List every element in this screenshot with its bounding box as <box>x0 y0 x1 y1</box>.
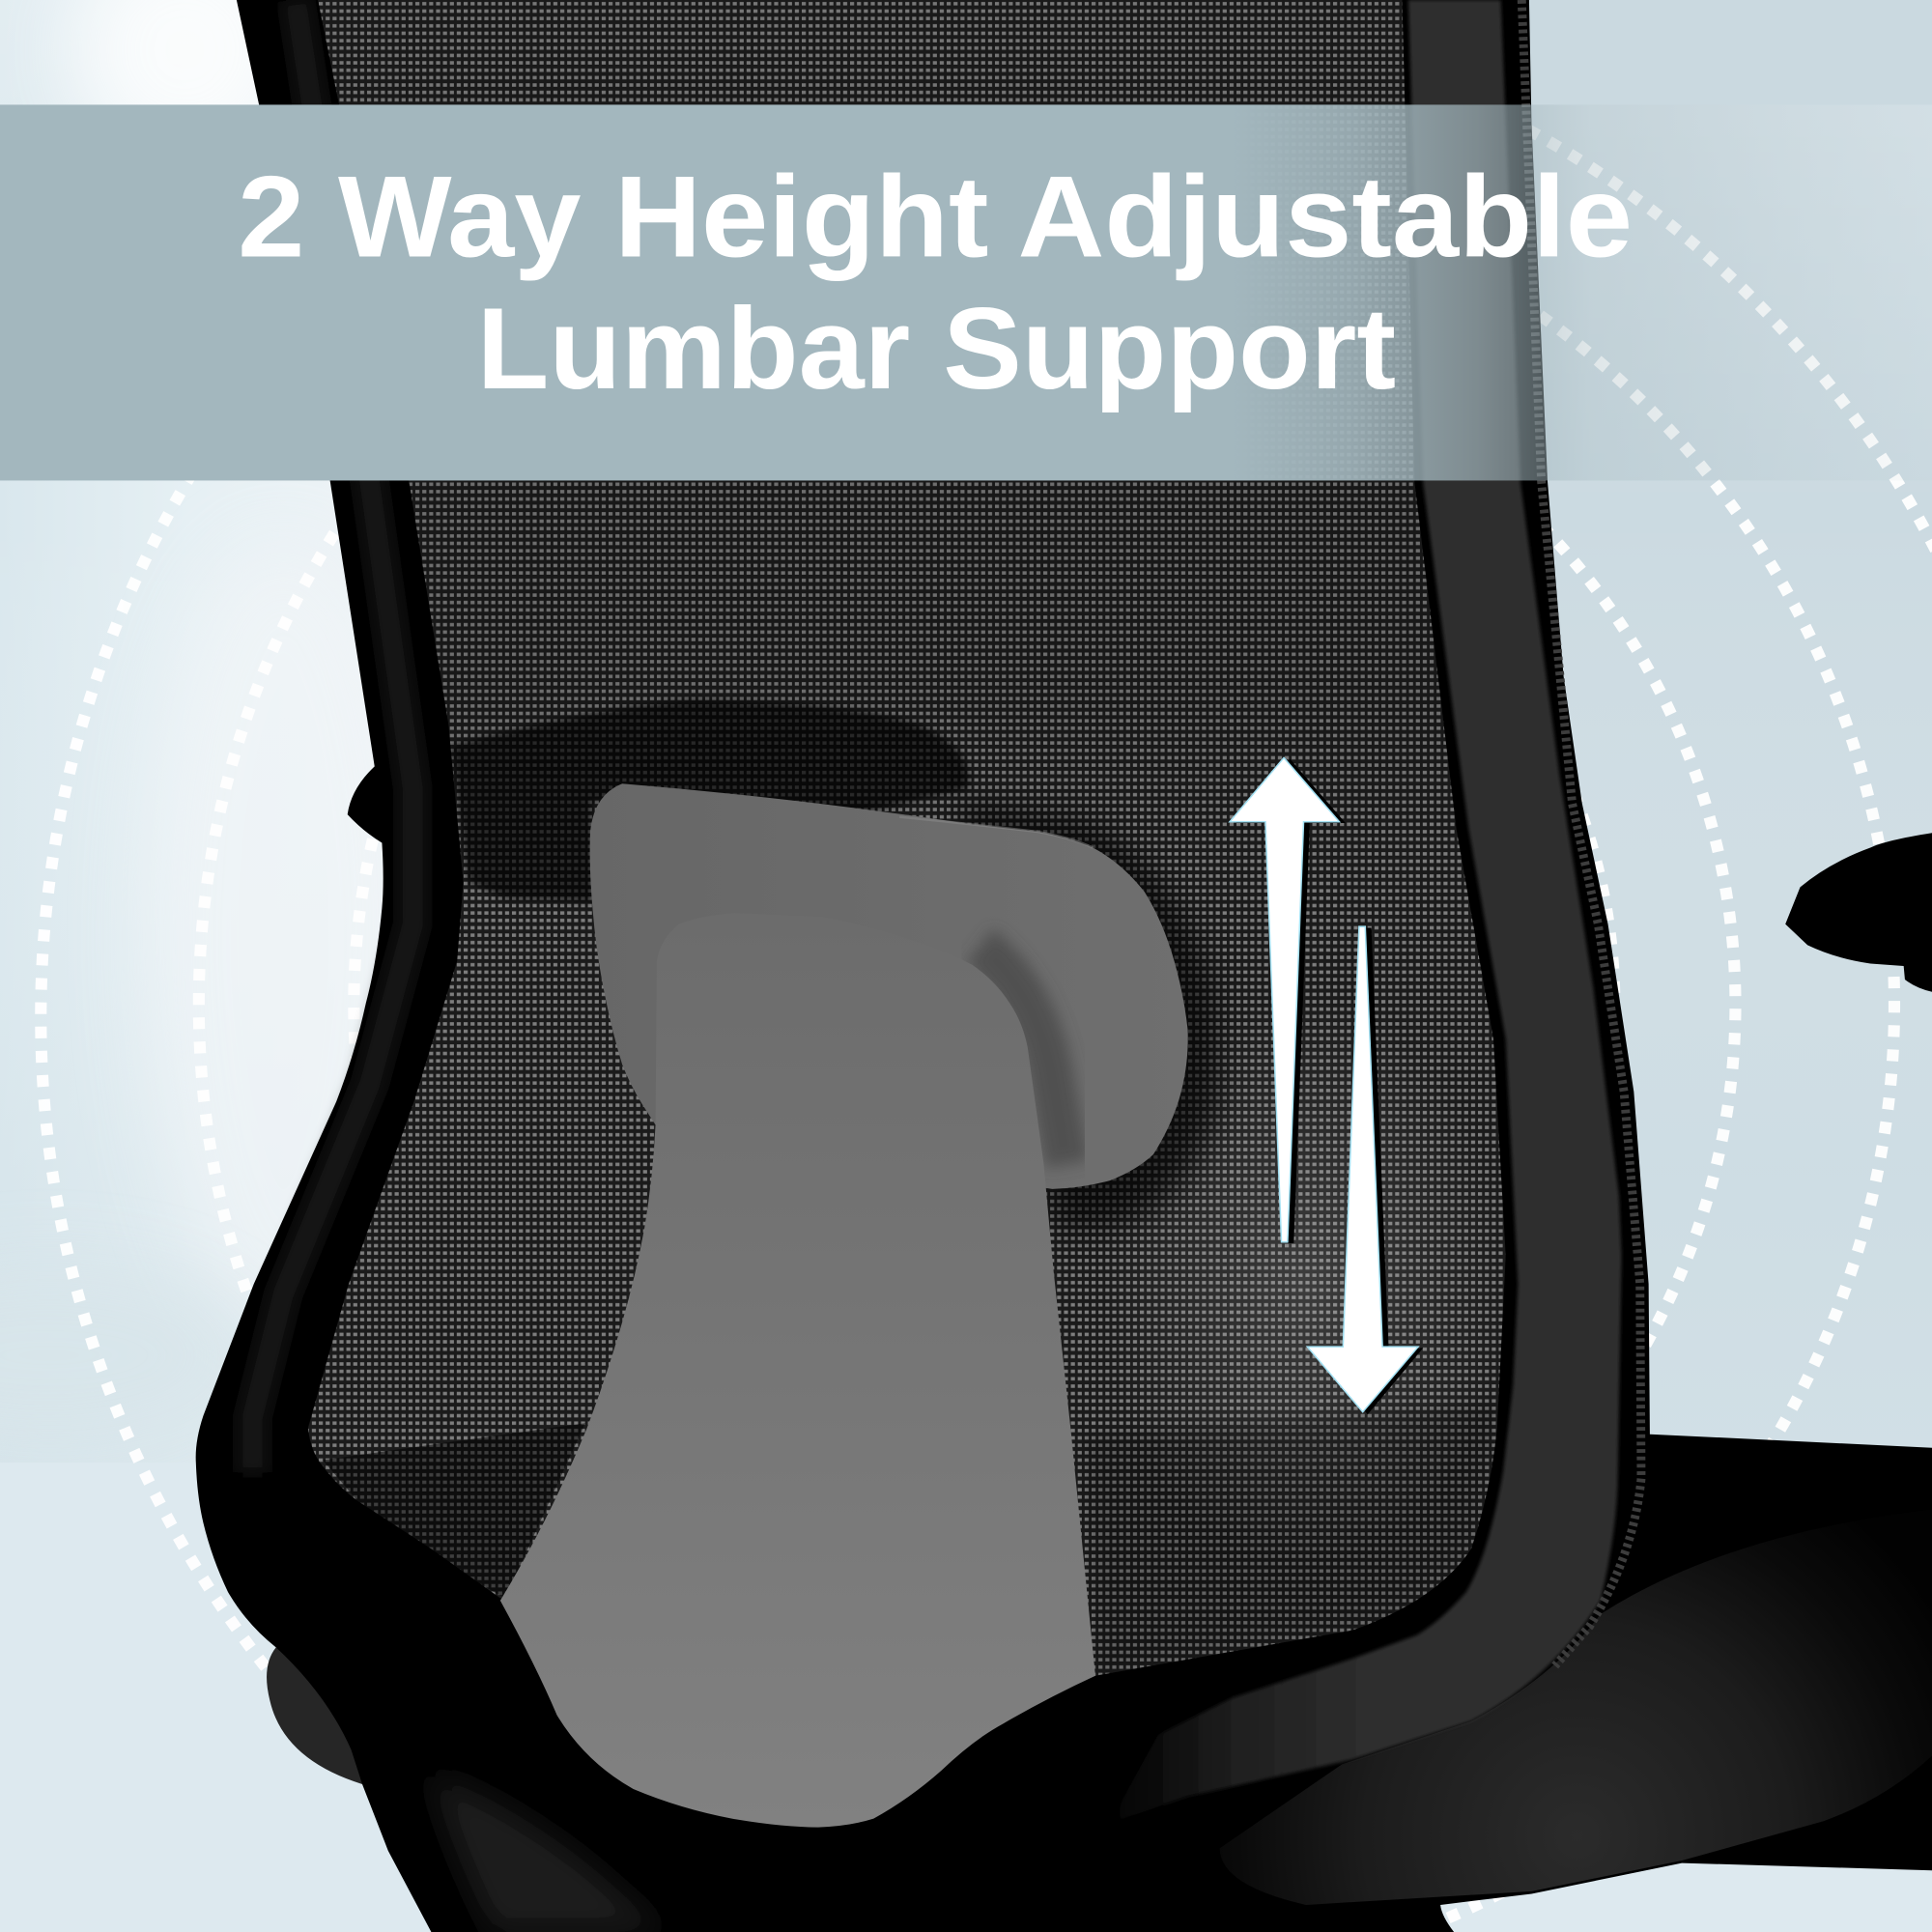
mesh darkening upper <box>318 0 1460 882</box>
mesh shadow lower right <box>1084 1405 1497 1676</box>
arrow up <box>1230 757 1346 1243</box>
arrow down <box>1307 926 1423 1414</box>
mesh shadow lower left <box>323 1423 585 1598</box>
chair armrest <box>1785 833 1932 992</box>
mesh back <box>308 0 1509 1676</box>
title line 1: 2 Way Height Adjustable <box>238 152 1633 281</box>
mesh glow lower right <box>1103 998 1509 1565</box>
title line 2: Lumbar Support <box>477 284 1396 413</box>
background <box>27 0 1932 1447</box>
dotted arcs: right <box>1233 23 1932 1929</box>
lumbar back pad shadow <box>961 804 1220 1233</box>
title banner <box>0 104 1932 480</box>
frame band right <box>1109 0 1622 1824</box>
frame highlight bottom <box>431 1775 666 1932</box>
lumbar back pad <box>590 783 1188 1189</box>
lumbar pad highlight <box>899 817 1093 848</box>
frame edge strip <box>1521 0 1641 1665</box>
lumbar front pad <box>500 913 1095 1828</box>
seat fabric <box>1220 1509 1932 1905</box>
dotted arcs: left <box>41 246 669 1848</box>
title <box>238 152 1633 413</box>
mesh shadow upper <box>451 699 969 902</box>
frame highlight left <box>252 0 412 1472</box>
chair knob <box>267 1647 370 1784</box>
lumbar pad inner shade <box>980 947 1067 1164</box>
